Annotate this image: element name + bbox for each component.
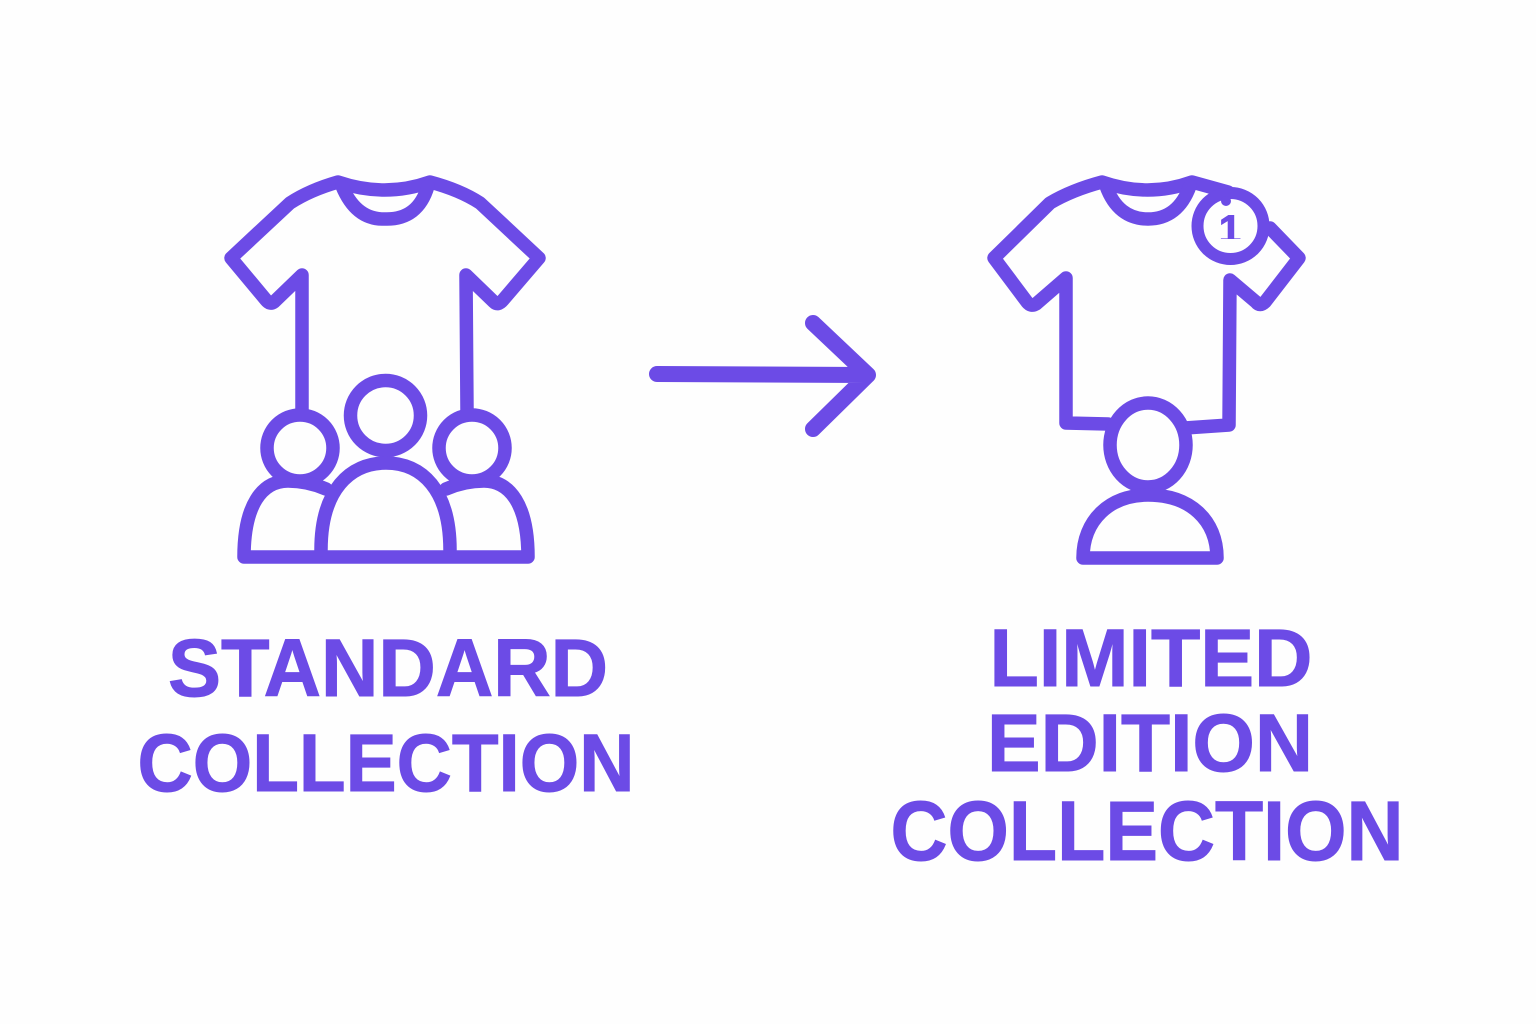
collar xyxy=(342,186,428,219)
heading: limited edition collection: COLLECTION xyxy=(890,784,1404,878)
heading: standard collection: STANDARD xyxy=(168,623,608,714)
numbered badge: 1 xyxy=(1219,208,1241,252)
t-shirt outline xyxy=(994,182,1299,428)
crowd of three people xyxy=(244,380,528,557)
arrow: standard to limited xyxy=(657,323,868,429)
icon: standard t-shirt with crowd xyxy=(231,182,539,557)
heading: limited edition collection xyxy=(890,613,1404,878)
heading: standard collection xyxy=(138,623,634,809)
heading: standard collection: COLLECTION xyxy=(138,718,634,809)
heading: limited edition collection: LIMITED xyxy=(990,613,1312,704)
numbered badge xyxy=(1198,193,1264,259)
heading: limited edition collection: EDITION xyxy=(987,698,1313,789)
t-shirt outline xyxy=(231,182,539,410)
icon: limited edition t-shirt with single person xyxy=(994,182,1299,558)
single person xyxy=(1083,403,1217,558)
collar xyxy=(1106,186,1190,219)
